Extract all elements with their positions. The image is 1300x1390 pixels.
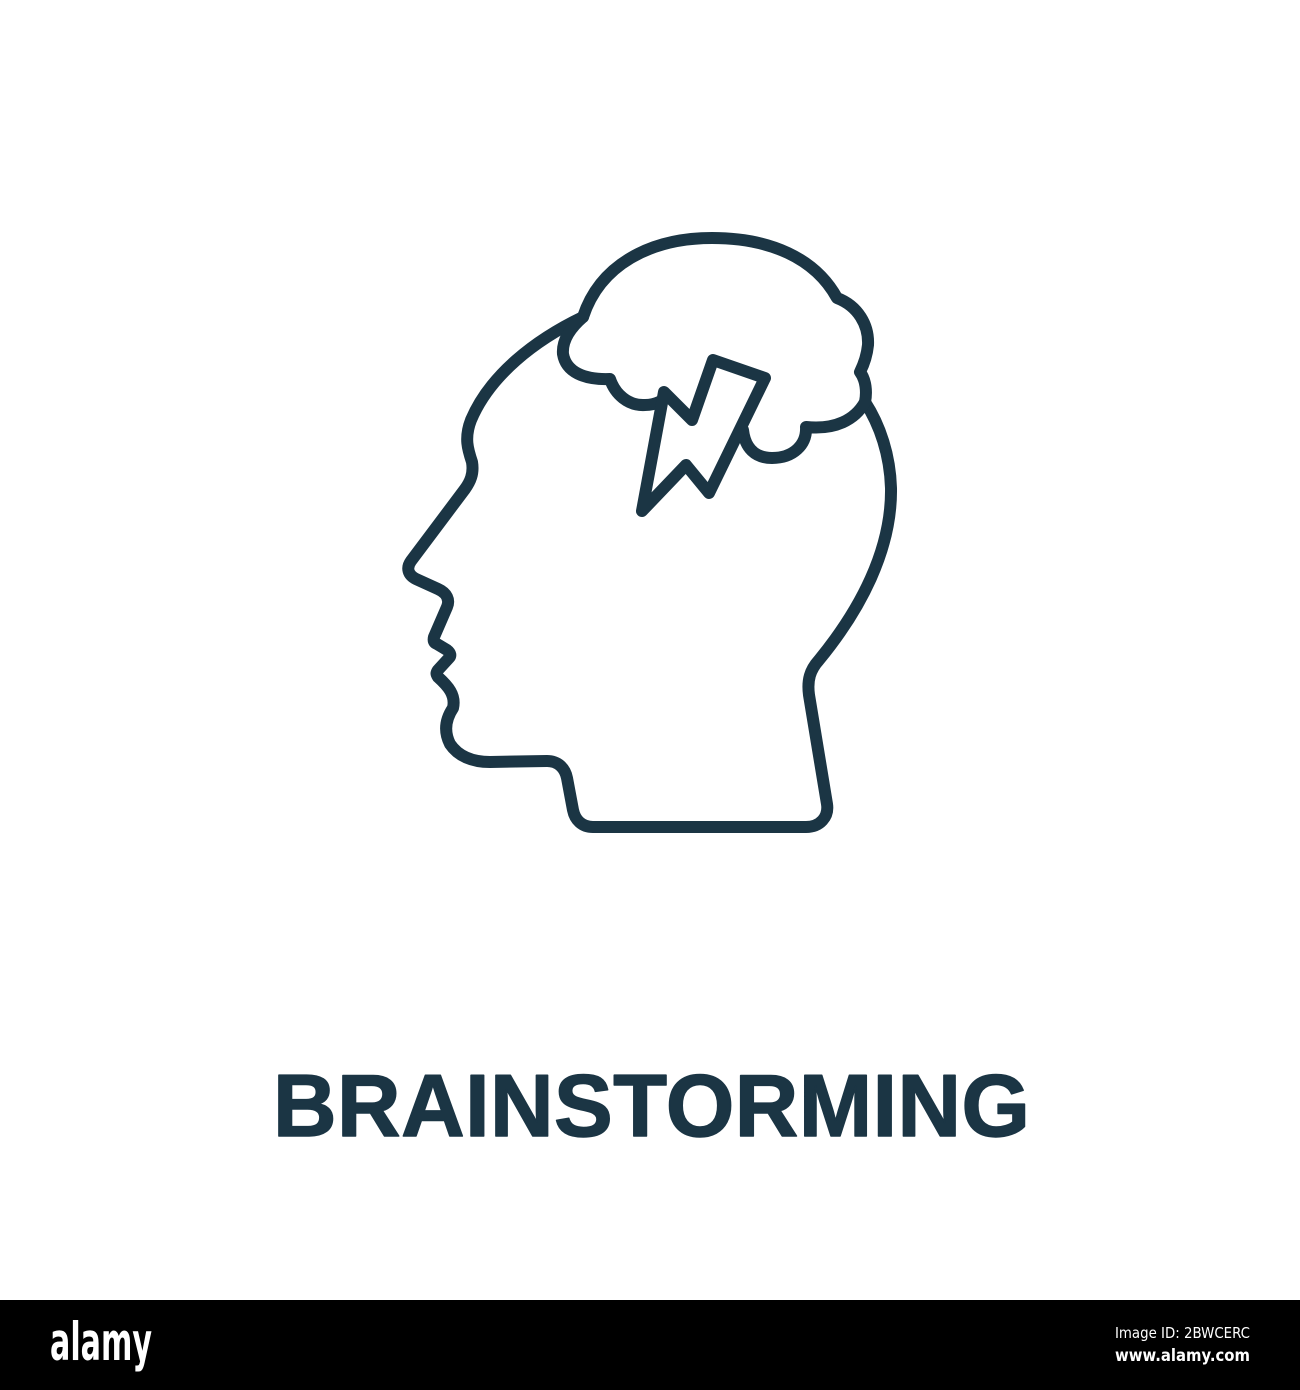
- head profile outline: [408, 317, 891, 827]
- footer url: www.alamy.com: [1115, 1346, 1250, 1366]
- footer image id: Image ID: 2BWCERC: [1115, 1324, 1250, 1342]
- brain cloud outline: [563, 238, 868, 458]
- title: BRAINSTORMING: BRAINSTORMING: [273, 1056, 1030, 1155]
- footer band: [0, 1300, 1300, 1390]
- icon: head with brain and lightning bolt: [408, 238, 891, 827]
- footer logo: alamy: alamy: [50, 1312, 152, 1373]
- lightning bolt: [642, 360, 765, 511]
